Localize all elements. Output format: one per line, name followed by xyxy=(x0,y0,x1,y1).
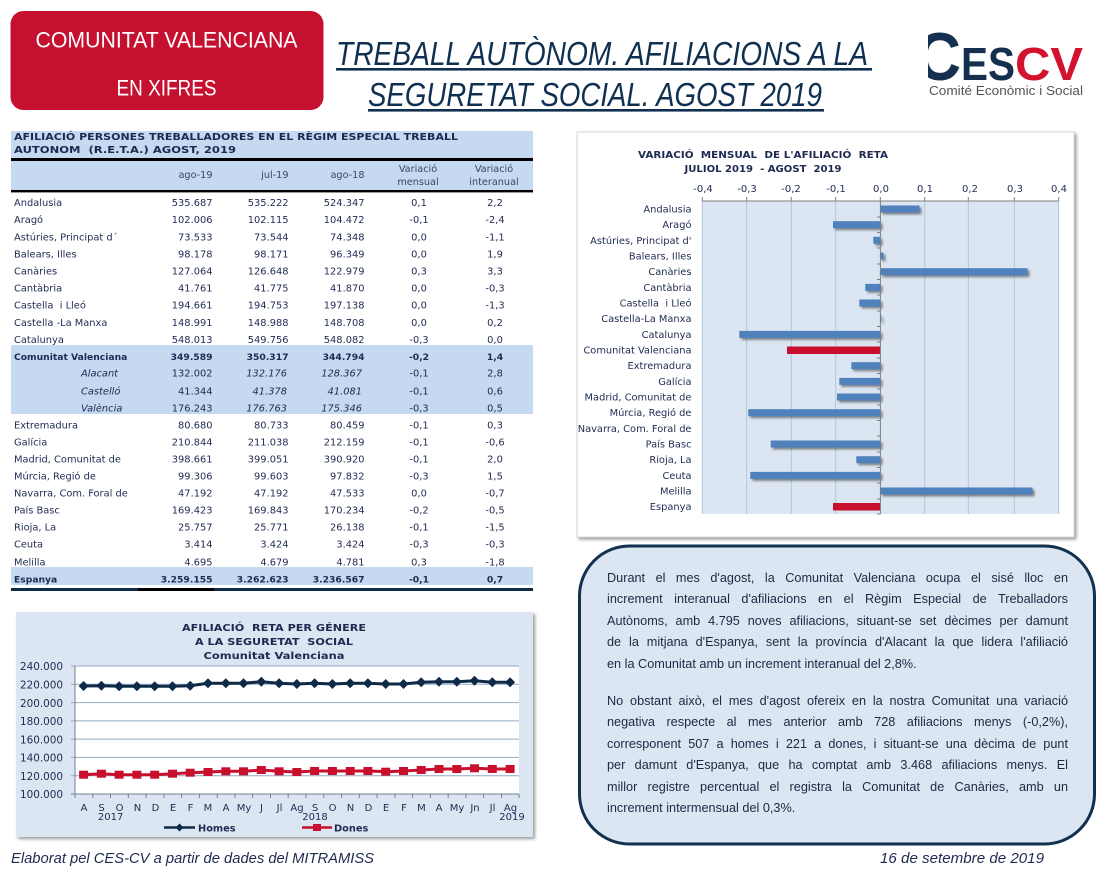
line chart title: Comunitat Valenciana xyxy=(204,651,344,662)
line chart y axis labels: 220.000 xyxy=(20,680,63,692)
table rows: 99.603 xyxy=(254,472,288,483)
bar chart title: VARIACIÓ MENSUAL DE L'AFILIACIÓ RETA xyxy=(638,148,888,161)
table rows: -0,1 xyxy=(409,455,429,466)
bar chart top axis labels: -0,3 xyxy=(737,184,757,195)
paragraph 1: Durant el mes d'agost, la Comunitat Valenciana ocupa el sisé lloc en xyxy=(607,571,1068,585)
zero axis xyxy=(877,201,880,514)
table rows: 0,3 xyxy=(411,266,427,278)
table heading xyxy=(11,130,533,158)
table rows: Múrcia, Regió de xyxy=(14,471,96,483)
title: TREBALL AUTÒNOM. AFILIACIONS A LA xyxy=(336,35,868,72)
table rows: 2,8 xyxy=(487,368,503,380)
table column headers xyxy=(11,158,533,192)
table rows: 41.344 xyxy=(178,386,212,398)
table rows: 0,3 xyxy=(487,420,503,432)
bar chart category labels: Espanya xyxy=(650,502,692,513)
logo: CES-CV: ES xyxy=(961,38,1015,90)
line chart x axis labels: D xyxy=(365,803,373,814)
line chart x axis labels: O xyxy=(329,803,337,814)
table rows: Rioja, La xyxy=(14,523,56,534)
table rows: 148.708 xyxy=(324,318,364,329)
paragraph 2: increment intermensual del 0,3%. xyxy=(607,801,795,815)
bar chart top axis labels: 0,4 xyxy=(1051,184,1067,195)
commentary text xyxy=(607,571,1068,815)
bar chart category labels: Múrcia, Regió de xyxy=(610,407,692,419)
line chart x axis labels: N xyxy=(347,803,354,814)
paragraph 2: No obstant això, el mes d'agost ofereix en la nostra Comunitat una variació xyxy=(607,694,1068,708)
line chart x axis labels: My xyxy=(237,803,251,814)
table rows: -1,5 xyxy=(485,523,505,534)
table rows: -0,1 xyxy=(409,523,429,534)
table rows: 549.756 xyxy=(248,335,288,346)
table rows: -0,6 xyxy=(485,438,505,449)
bar chart category labels: Aragó xyxy=(662,219,692,231)
line chart x axis labels: E xyxy=(383,803,389,814)
table rows: 73.533 xyxy=(178,232,212,244)
table rows: 3.424 xyxy=(260,540,288,551)
bar chart title xyxy=(638,148,888,175)
table rows: 1,5 xyxy=(487,472,503,483)
table rows: Madrid, Comunitat de xyxy=(14,455,121,466)
bar chart category labels: Galícia xyxy=(658,376,692,388)
table rows: 99.306 xyxy=(178,472,212,483)
paragraph 1: increment interanual d'afiliacions en el Règim Especial de Treballadors xyxy=(607,592,1068,606)
line chart x axis labels: Jl xyxy=(276,803,282,814)
bar chart category labels: País Basc xyxy=(646,438,692,450)
table rows: País Basc xyxy=(14,505,60,517)
line chart x axis labels: E xyxy=(170,803,176,814)
table rows: 0,2 xyxy=(487,318,503,329)
table rows: 548.013 xyxy=(172,335,212,346)
table rows xyxy=(14,198,505,586)
line chart y axis labels: 140.000 xyxy=(20,753,63,765)
line chart x axis labels: A xyxy=(223,803,230,814)
line chart legend xyxy=(164,824,368,834)
table rows: 548.082 xyxy=(324,335,364,346)
series: Dones xyxy=(84,768,510,775)
table rows: Canàries xyxy=(14,266,57,278)
line chart x axis labels: M xyxy=(417,803,426,814)
line chart x axis labels: Jn xyxy=(469,803,480,814)
table column headers: mensual xyxy=(397,177,439,188)
table rows: -0,2 xyxy=(409,352,429,363)
line chart x axis labels: 2019 xyxy=(499,812,525,823)
table rows: -0,1 xyxy=(409,386,429,398)
bar chart top axis labels: 0,2 xyxy=(962,184,978,195)
table rows: 0,0 xyxy=(411,318,427,329)
line chart x axis labels: My xyxy=(450,803,464,814)
table rows: Ceuta xyxy=(14,540,43,551)
table rows: 3.424 xyxy=(336,540,364,551)
table rows: 175.346 xyxy=(321,404,362,415)
table rows: 41.378 xyxy=(253,386,287,398)
line chart x axis labels: A xyxy=(436,803,443,814)
line chart x axis labels: 2017 xyxy=(98,812,123,823)
table rows: -0,3 xyxy=(409,472,429,483)
bar chart plot area xyxy=(702,197,1059,514)
bar chart category labels: Comunitat Valenciana xyxy=(583,346,692,356)
table rows: 390.920 xyxy=(324,455,364,466)
table rows: Navarra, Com. Foral de xyxy=(14,489,128,500)
table rows: 0,1 xyxy=(411,198,427,209)
line chart x axis labels: D xyxy=(152,803,160,814)
table rows: Cantàbria xyxy=(14,282,62,294)
table rows: 3.262.623 xyxy=(237,574,288,586)
table rows: Castelló xyxy=(81,386,120,398)
table rows: -0,1 xyxy=(409,438,429,449)
table rows: 127.064 xyxy=(172,266,212,278)
line chart x axis labels: M xyxy=(204,803,212,814)
paragraph 2 xyxy=(607,694,1068,815)
table rows: 194.661 xyxy=(172,301,212,312)
table rows: 344.794 xyxy=(323,352,364,363)
header badge: Comunitat Valenciana en xifres: COMUNITAT VALENCIANA xyxy=(36,28,298,52)
bar chart category labels: Andalusia xyxy=(643,204,692,216)
table rows: 47.533 xyxy=(330,489,364,500)
table rows: 0,0 xyxy=(411,301,427,312)
table rows: 524.347 xyxy=(324,198,364,209)
line chart y axis labels xyxy=(20,661,63,801)
table rows: Balears, Illes xyxy=(14,250,77,260)
table rows: 535.222 xyxy=(248,198,288,209)
table rows: -0,1 xyxy=(409,574,429,586)
bar chart category labels xyxy=(578,204,692,513)
table rows: 170.234 xyxy=(324,506,364,517)
footer: source: Elaborat pel CES-CV a partir de dades del MITRAMISS xyxy=(11,850,374,867)
table rows: 210.844 xyxy=(172,438,212,449)
table rows: 2,0 xyxy=(487,455,503,466)
table heading: AUTONOM (R.E.T.A.) AGOST, 2019 xyxy=(14,145,236,156)
table rows: 132.002 xyxy=(172,368,212,380)
table rows: -0,1 xyxy=(409,368,429,380)
table rows: 102.006 xyxy=(172,215,212,226)
table rows: Espanya xyxy=(14,574,57,586)
paragraph 2: corresponent 507 a homes i 221 a dones, i situant-se una dècima de punt xyxy=(607,737,1068,751)
bar chart panel xyxy=(577,132,1074,537)
footer: date: 16 de setembre de 2019 xyxy=(880,850,1045,867)
bar chart title: JULIOL 2019 - AGOST 2019 xyxy=(683,164,842,175)
table rows: 3.259.155 xyxy=(161,574,212,586)
table rows: 122.979 xyxy=(324,266,364,278)
line chart x axis labels: N xyxy=(134,803,141,814)
line chart x axis labels xyxy=(81,803,525,823)
table rows: -0,3 xyxy=(409,540,429,551)
table rows: 97.832 xyxy=(330,472,364,483)
line chart x axis labels: Jl xyxy=(489,803,495,814)
line chart y axis labels: 160.000 xyxy=(20,734,63,746)
table rows: 0,0 xyxy=(411,232,427,244)
bar chart category labels: Astúries, Principat d' xyxy=(590,235,692,247)
line chart x axis labels: Ag xyxy=(290,803,304,814)
table rows: 104.472 xyxy=(324,215,364,226)
paragraph 1: Autònoms, amb 4.795 noves afiliacions, situant-se set dècimes per damunt xyxy=(607,614,1068,628)
table rows: 25.771 xyxy=(254,523,288,534)
line chart: afiliació per gènere xyxy=(16,612,533,837)
table rows: Andalusia xyxy=(14,198,62,209)
table column headers: ago-19 xyxy=(178,170,212,181)
bar chart category labels: Cantàbria xyxy=(643,282,692,294)
line chart title: AFILIACIÓ RETA PER GÉNERE xyxy=(182,621,366,634)
table rows: Castella -La Manxa xyxy=(14,318,107,329)
bar chart category labels: Rioja, La xyxy=(649,455,692,466)
table rows: 0,5 xyxy=(487,404,503,415)
line chart x axis labels: J xyxy=(259,803,263,814)
line chart title xyxy=(182,621,366,662)
table rows: Alacant xyxy=(80,368,119,380)
table rows: 0,0 xyxy=(487,335,503,346)
line chart legend: Homes xyxy=(198,824,236,834)
table rows: 41.081 xyxy=(328,386,362,398)
data table: afiliació RETA xyxy=(11,130,533,591)
logo: CES-CV: CV xyxy=(1015,38,1083,90)
table rows: 399.051 xyxy=(248,455,288,466)
title: SEGURETAT SOCIAL. AGOST 2019 xyxy=(368,76,822,113)
table rows: 128.367 xyxy=(321,368,363,380)
series: Homes xyxy=(84,681,510,686)
bar chart category labels: Ceuta xyxy=(662,471,692,482)
table rows: 148.991 xyxy=(172,318,212,329)
title xyxy=(336,35,872,113)
table rows: 349.589 xyxy=(171,352,212,363)
table rows: 25.757 xyxy=(178,523,212,534)
bar chart top axis labels xyxy=(693,184,1067,195)
table rows: 80.459 xyxy=(330,420,364,432)
table rows: 0,3 xyxy=(411,558,427,568)
table rows: 4.781 xyxy=(336,558,364,568)
bar chart top axis labels: -0,1 xyxy=(826,184,846,195)
line chart x axis labels: Ag xyxy=(504,803,517,814)
table rows: -0,3 xyxy=(485,540,505,551)
bar chart top axis labels: 0,0 xyxy=(873,184,889,195)
logo: CES-CV xyxy=(928,32,1083,95)
table rows: 73.544 xyxy=(254,232,288,244)
paragraph 2: negativa respecte al mes anterior amb 728 afiliacions menys (-0,2%), xyxy=(607,715,1068,729)
table rows: 102.115 xyxy=(248,215,288,226)
line chart panel xyxy=(16,612,533,837)
line chart y axis labels: 180.000 xyxy=(20,716,63,728)
line chart x axis labels: S xyxy=(312,803,318,814)
table rows: 3.414 xyxy=(184,540,212,551)
line chart y axis labels: 200.000 xyxy=(20,698,63,710)
table rows: -0,1 xyxy=(409,215,429,226)
line chart x axis labels: 2018 xyxy=(302,812,328,823)
table rows: 169.423 xyxy=(172,506,212,517)
table column headers: Variació xyxy=(475,163,513,175)
bar chart top axis labels: -0,2 xyxy=(781,184,801,195)
paragraph 1: de la mitjana d'Espanya, sent la província d'Alacant la que lidera l'afiliació xyxy=(607,635,1068,649)
table rows: 0,0 xyxy=(411,284,427,294)
table rows: 41.761 xyxy=(178,284,212,294)
table rows: Aragó xyxy=(14,214,43,226)
table rows: -1,3 xyxy=(485,301,505,312)
table rows: 0,6 xyxy=(487,386,503,398)
table rows: 212.159 xyxy=(324,438,364,449)
table column headers: interanual xyxy=(469,177,519,188)
table rows: -0,3 xyxy=(409,404,429,415)
table rows: 47.192 xyxy=(178,489,212,500)
line chart x axis labels: A xyxy=(81,803,88,814)
line chart plot area xyxy=(71,666,519,798)
table rows: 47.192 xyxy=(254,489,288,500)
bar chart category labels: Extremadura xyxy=(628,361,692,372)
table rows: 98.171 xyxy=(254,250,288,260)
table rows: 535.687 xyxy=(172,198,212,209)
line chart legend: Dones xyxy=(334,824,368,834)
table rows: 74.348 xyxy=(330,232,364,244)
table rows: 197.138 xyxy=(324,301,364,312)
table column headers: jul-19 xyxy=(260,170,288,181)
text panel background xyxy=(580,546,1094,844)
table heading: AFILIACIÓ PERSONES TREBALLADORES EN EL RÈGIM ESPECIAL TREBALL xyxy=(14,130,458,143)
highlighted bands xyxy=(11,345,533,591)
bar chart top axis labels: 0,3 xyxy=(1007,184,1023,195)
table rows: Comunitat Valenciana xyxy=(14,352,127,363)
table rows: -0,7 xyxy=(485,489,505,500)
logo: CES-CV: Comité Econòmic i Social xyxy=(929,83,1083,98)
line chart y axis labels: 240.000 xyxy=(20,661,63,673)
table rows: 0,0 xyxy=(411,489,427,500)
table rows: 0,7 xyxy=(487,574,503,586)
table rows: 169.843 xyxy=(248,506,288,517)
table rows: 41.775 xyxy=(254,284,288,294)
table rows: 398.661 xyxy=(172,455,212,466)
table rows: 0,0 xyxy=(411,250,427,260)
bar chart category labels: Castella i Lleó xyxy=(620,298,692,310)
line chart y axis labels: 120.000 xyxy=(20,771,63,783)
table rows: -0,5 xyxy=(485,506,505,517)
table column headers: ago-18 xyxy=(330,170,364,181)
table rows: 194.753 xyxy=(248,301,288,312)
bar chart category labels: Castella-La Manxa xyxy=(601,314,692,325)
table rows: Melilla xyxy=(14,558,46,568)
bar chart category labels: Madrid, Comunitat de xyxy=(585,392,692,404)
table rows: Castella i Lleó xyxy=(14,300,86,312)
table rows: Extremadura xyxy=(14,420,78,432)
line chart title: A LA SEGURETAT SOCIAL xyxy=(195,637,353,648)
table rows: Galícia xyxy=(14,437,47,449)
logo: CES-CV: C xyxy=(916,19,961,95)
bar chart category labels: Navarra, Com. Foral de xyxy=(578,424,692,435)
bars xyxy=(739,206,1032,510)
bar chart top axis labels: 0,1 xyxy=(917,184,933,195)
table rows: -0,2 xyxy=(409,506,429,517)
table rows: 148.988 xyxy=(248,318,288,329)
bar chart category labels: Balears, Illes xyxy=(629,252,692,262)
table rows: 176.763 xyxy=(246,404,287,415)
paragraph 1: en la Comunitat amb un increment interanual del 2,8%. xyxy=(607,657,917,671)
table rows: -1,8 xyxy=(485,558,505,568)
table rows: 3,3 xyxy=(487,266,503,278)
bar chart top axis labels: -0,4 xyxy=(693,184,713,195)
table rows: -0,3 xyxy=(485,284,505,294)
table rows: 211.038 xyxy=(248,438,288,449)
table rows: 98.178 xyxy=(178,250,212,260)
table rows: València xyxy=(81,403,122,415)
bar chart category labels: Canàries xyxy=(648,266,692,278)
table rows: -2,4 xyxy=(485,215,505,226)
table rows: -0,1 xyxy=(409,420,429,432)
line chart x axis labels: O xyxy=(116,803,124,814)
line chart x axis labels: S xyxy=(98,803,105,814)
table rows: 80.680 xyxy=(178,420,212,432)
table rows: Astúries, Principat d´ xyxy=(14,232,118,244)
table rows: 96.349 xyxy=(330,250,364,260)
table rows: -0,3 xyxy=(409,335,429,346)
line chart x axis labels: F xyxy=(188,803,194,814)
table rows: 1,4 xyxy=(487,352,503,363)
line chart y axis labels: 100.000 xyxy=(20,789,63,801)
table rows: 126.648 xyxy=(248,266,288,278)
table rows: 3.236.567 xyxy=(313,574,364,586)
paragraph 1 xyxy=(607,571,1068,671)
table rows: 2,2 xyxy=(487,198,503,209)
table column headers: Variació xyxy=(399,163,437,175)
line chart x axis labels: F xyxy=(401,803,407,814)
header badge: Comunitat Valenciana en xifres: EN XIFRES xyxy=(116,76,216,100)
table rows: 4.679 xyxy=(260,558,288,568)
table rows: -1,1 xyxy=(485,232,505,244)
table rows: 350.317 xyxy=(247,352,288,363)
table rows: 26.138 xyxy=(330,523,364,534)
bar chart category labels: Catalunya xyxy=(642,330,692,341)
header badge: Comunitat Valenciana en xifres xyxy=(10,11,324,110)
bar chart: variació mensual xyxy=(577,132,1074,537)
table rows: 4.695 xyxy=(184,558,212,568)
table rows: Catalunya xyxy=(14,335,64,346)
bar chart category labels: Melilla xyxy=(660,486,692,498)
table rows: 80.733 xyxy=(254,420,288,432)
table rows: 132.176 xyxy=(246,368,287,380)
table rows: 1,9 xyxy=(487,250,503,260)
table rows: 41.870 xyxy=(330,284,364,294)
paragraph 2: millor registre percentual el registra la Comunitat de Canàries, amb un xyxy=(607,780,1068,794)
table rows: 176.243 xyxy=(172,404,212,415)
paragraph 2: per damunt d'Espanya, que ha comptat amb 3.468 afiliacions menys. El xyxy=(607,758,1068,772)
